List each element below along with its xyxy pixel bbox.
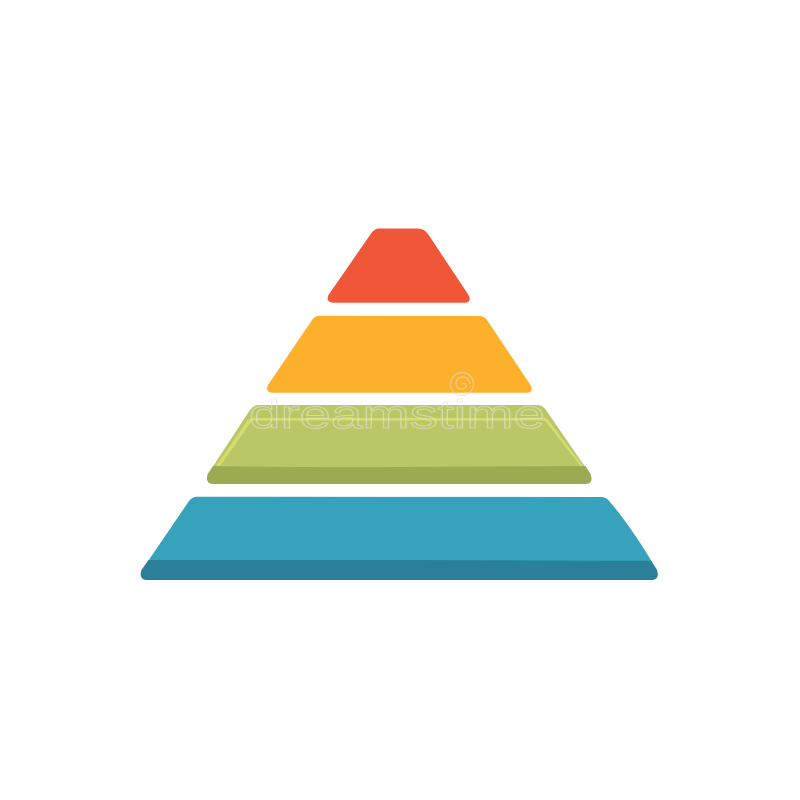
watermark text: dreamstime <box>249 393 545 437</box>
blue face <box>142 497 657 570</box>
tier 4: blue <box>141 497 658 580</box>
tier 2: orange <box>267 316 532 393</box>
watermark spiral icon <box>450 372 474 396</box>
green highlight edge <box>216 418 583 466</box>
green bottom band <box>207 466 592 484</box>
tier 3: green <box>207 405 592 484</box>
watermark <box>249 372 545 437</box>
tier 1: red top <box>328 228 470 303</box>
blue bottom band <box>141 560 658 580</box>
green face <box>208 405 590 474</box>
